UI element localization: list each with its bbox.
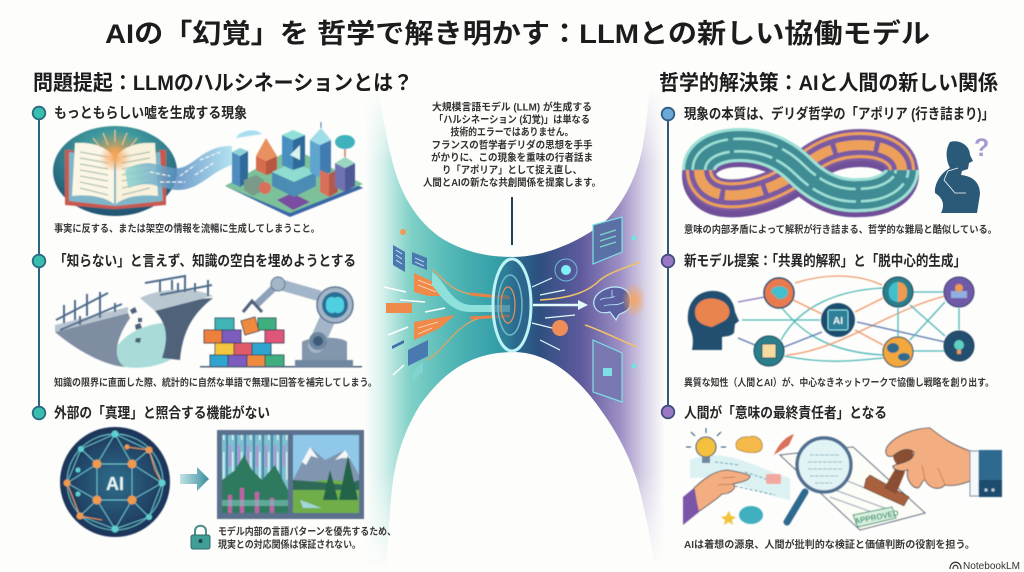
logo: NotebookLM: NotebookLM	[963, 560, 1020, 572]
node: AI chip: AI	[833, 316, 843, 327]
icon: broken bridge	[55, 276, 213, 368]
panel: central funnel illustration	[360, 60, 670, 572]
icon: isometric city	[225, 122, 363, 217]
idea cloud	[736, 436, 762, 453]
right hand	[886, 428, 973, 488]
speech bubbles	[766, 474, 781, 484]
item 1 heading: もっともらしい嘘を生成する現象	[54, 104, 247, 122]
data stream	[690, 455, 790, 500]
item 3 heading: 人間が「意味の最終責任者」となる	[684, 404, 887, 422]
timeline	[662, 108, 674, 418]
timeline	[33, 107, 45, 419]
human head	[688, 291, 739, 350]
text block: central summary: 大規模言語モデル (LLM) が生成する	[432, 100, 592, 114]
diagram: decentralized network	[688, 276, 974, 367]
text block: central summary: 「ハルシネーション (幻覚)」は単なる	[434, 113, 590, 126]
item 2 heading: 新モデル提案：「共異的解釈」と「脱中心的生成」	[684, 252, 966, 270]
text block: central summary	[423, 100, 601, 189]
right insight elements	[532, 217, 646, 402]
text block: central summary: 人間とAIの新たな共創関係を提案します。	[423, 176, 601, 189]
node: lightbulb	[944, 331, 974, 361]
item 2 caption: 知識の限界に直面した際、統計的に自然な単語で無理に回答を補完してしまう。	[54, 376, 377, 389]
lightbulb	[696, 437, 716, 457]
node: split brain	[883, 277, 913, 307]
node: orange brains	[883, 337, 913, 367]
item 1 caption: 事実に反する、または架空の情報を流暢に生成してしまうこと。	[54, 222, 320, 235]
item 3 caption: AIは着想の源泉、人間が批判的な検証と価値判断の役割を担う。	[684, 538, 975, 551]
node: chip	[754, 336, 784, 366]
item 3 caption: モデル内部の言語パターンを優先するため、	[218, 525, 396, 538]
quill	[774, 434, 794, 455]
portal ring	[493, 259, 531, 351]
text block: central summary: 技術的エラーではありません。	[450, 126, 574, 138]
item 3 caption: 現実との対応関係は保証されない。	[218, 538, 361, 551]
arrow: AI to window	[180, 467, 209, 491]
icon: thinking person with question mark	[935, 134, 989, 213]
node: purple idea	[944, 277, 974, 307]
text block: central summary: り「アポリア」として捉え直し、	[442, 164, 582, 176]
icon: padlock	[191, 526, 210, 549]
icon: AI network sphere	[60, 427, 170, 537]
item 3 caption	[218, 525, 396, 551]
node: AI chip	[821, 303, 855, 337]
icon: brick wall and robot arm	[200, 277, 362, 368]
icon: AI network sphere: AI	[106, 474, 124, 494]
title: AIの「幻覚」を 哲学で解き明かす：LLMとの新しい協働モデル	[105, 18, 930, 49]
icon: distorted and real landscape window	[217, 430, 364, 519]
brain outline	[594, 287, 630, 320]
heading: problem statement: 問題提起：LLMのハルシネーションとは？	[33, 72, 413, 95]
icon: human review with magnifier and stamp: APPROVED	[854, 509, 900, 526]
node: brain	[764, 278, 794, 308]
icon: human review with magnifier and stamp	[683, 428, 1002, 530]
text block: central summary: がかりに、この現象を重味の行者話ま	[431, 151, 593, 164]
item 1 caption: 意味の内部矛盾によって解釈が行き詰まる、哲学的な難局と酷似している。	[684, 223, 997, 236]
left hand	[694, 470, 750, 512]
item 2 heading: 「知らない」と言えず、知識の空白を埋めようとする	[54, 252, 356, 270]
icon: infinity maze	[699, 145, 902, 200]
document	[780, 447, 925, 530]
panel: philosophical solution	[659, 72, 1002, 551]
text block: central summary: フランスの哲学者デリダの思想を手手	[432, 138, 592, 152]
left data fragments	[384, 229, 510, 382]
icon: open book	[53, 126, 177, 216]
arrow: text stream from book to city	[125, 146, 232, 190]
heading: philosophical solution: 哲学的解決策：AIと人間の新しい関係	[659, 72, 998, 95]
icon: thinking person with question mark: ?	[974, 134, 989, 162]
item 3 heading: 外部の「真理」と照合する機能がない	[54, 404, 270, 422]
connector line	[511, 197, 513, 245]
panel: problem statement	[33, 72, 413, 551]
magnifier	[787, 492, 805, 522]
stamp	[864, 475, 909, 506]
network links	[738, 276, 959, 361]
